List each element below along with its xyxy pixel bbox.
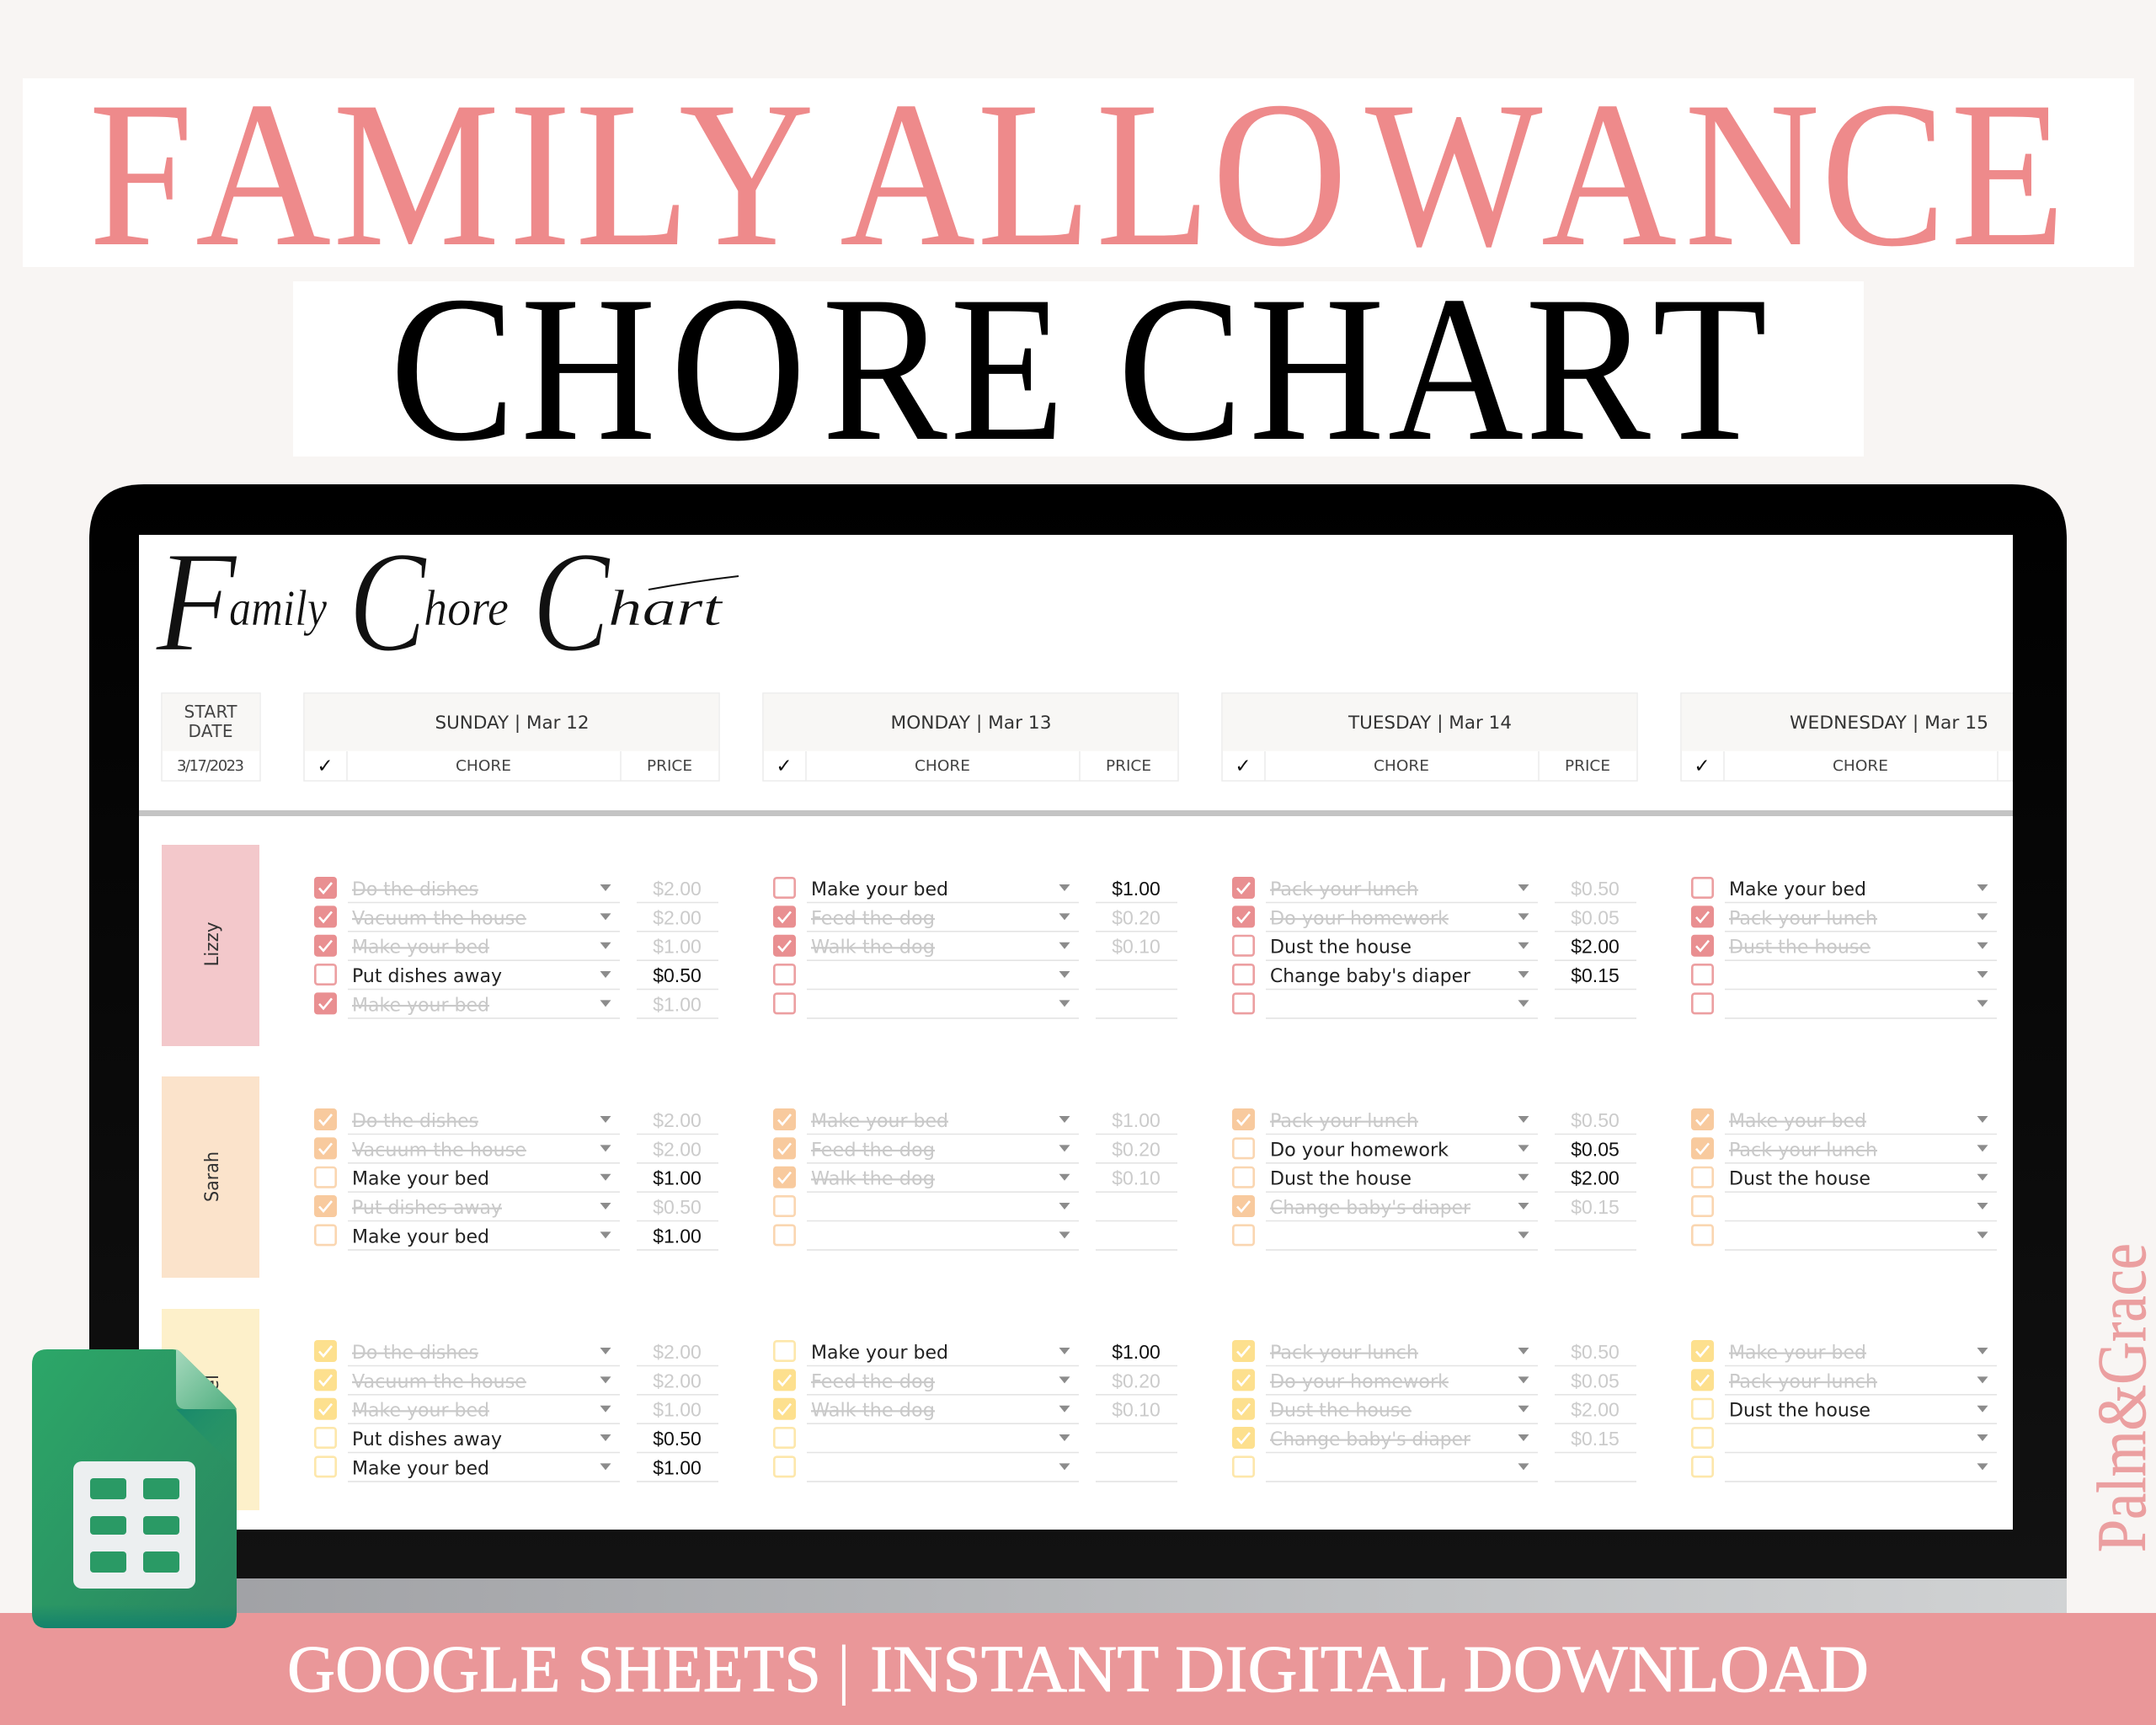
spreadsheet script title: F (155, 522, 238, 682)
Sarah Monday chores: Make your bed (811, 1111, 948, 1132)
icon: Google Sheets (32, 1349, 237, 1628)
day header: Wednesday: WEDNESDAY | Mar 15 (1790, 713, 1988, 734)
Sarah Wednesday chores: Dust the house (1729, 1169, 1870, 1190)
Sarah Tuesday chores: Do your homework (1270, 1140, 1449, 1161)
Lizzy Monday chores: Walk the dog (811, 937, 935, 959)
Lizzy Sunday chores: Do the dishes (352, 879, 478, 900)
Sarah Wednesday chores (1691, 1108, 1997, 1251)
third child Sunday chores: $1.00 (653, 1456, 702, 1478)
third child Monday chores: Walk the dog (811, 1401, 935, 1422)
day header: Monday: MONDAY | Mar 13 (891, 713, 1051, 734)
day header: Monday: CHORE (915, 757, 970, 775)
Sarah Wednesday chores: Make your bed (1729, 1111, 1866, 1132)
third child Wednesday chores: Pack your lunch (1729, 1371, 1877, 1392)
Sarah Tuesday chores: $2.00 (1571, 1167, 1620, 1189)
Lizzy Sunday chores: $1.00 (653, 936, 702, 958)
spreadsheet script title: C (349, 522, 428, 682)
day header: Tuesday: CHORE (1374, 757, 1429, 775)
Lizzy Tuesday chores: $0.50 (1571, 878, 1620, 900)
Sarah Tuesday chores: $0.05 (1571, 1138, 1620, 1160)
third child Tuesday chores: $0.05 (1571, 1370, 1620, 1391)
third child Sunday chores: Make your bed (352, 1458, 489, 1479)
third child Monday chores (773, 1341, 1177, 1482)
third child Sunday chores: $1.00 (653, 1399, 702, 1421)
spreadsheet script title (156, 555, 739, 650)
Lizzy Monday chores: $1.00 (1112, 878, 1161, 900)
spreadsheet script title: amily (229, 580, 327, 636)
spreadsheet script title: hart (608, 580, 723, 636)
Sarah Tuesday chores: Pack your lunch (1270, 1111, 1418, 1132)
third child Monday chores: $1.00 (1112, 1341, 1161, 1363)
Lizzy Tuesday chores: $0.15 (1571, 964, 1620, 986)
Lizzy Tuesday chores: Do your homework (1270, 908, 1449, 929)
day header: Tuesday: TUESDAY | Mar 14 (1348, 713, 1512, 734)
third child Sunday chores: Make your bed (352, 1401, 489, 1422)
Sarah Tuesday chores (1232, 1108, 1636, 1250)
start date box (162, 693, 260, 781)
Lizzy Tuesday chores: Dust the house (1270, 937, 1412, 959)
Lizzy Sunday chores (314, 877, 718, 1018)
day header: Monday: PRICE (1106, 757, 1151, 775)
day header: Sunday: CHORE (456, 757, 511, 775)
third child Monday chores: $0.10 (1112, 1399, 1161, 1421)
footer banner (0, 1613, 2156, 1725)
third child Monday chores: $0.20 (1112, 1370, 1161, 1391)
Lizzy Wednesday chores: Pack your lunch (1729, 908, 1877, 929)
start date box: 3/17/2023 (177, 757, 244, 775)
Sarah Monday chores: Walk the dog (811, 1169, 935, 1190)
Lizzy Monday chores: $0.10 (1112, 936, 1161, 958)
Lizzy Sunday chores: $1.00 (653, 993, 702, 1015)
Sarah Sunday chores: Make your bed (352, 1226, 489, 1247)
Sarah Sunday chores: Vacuum the house (352, 1140, 526, 1161)
footer text (287, 1633, 1869, 1706)
Sarah Tuesday chores: $0.15 (1571, 1196, 1620, 1218)
third child Wednesday chores: Dust the house (1729, 1401, 1870, 1422)
third child Sunday chores: Put dishes away (352, 1429, 502, 1450)
Sarah Sunday chores: $1.00 (653, 1167, 702, 1189)
Lizzy Sunday chores: Put dishes away (352, 966, 502, 987)
Sarah Sunday chores: Make your bed (352, 1169, 489, 1190)
Sarah Sunday chores: $0.50 (653, 1196, 702, 1218)
Lizzy Sunday chores: Make your bed (352, 995, 489, 1016)
Lizzy Monday chores: Make your bed (811, 879, 948, 900)
Sarah Sunday chores: Put dishes away (352, 1198, 502, 1219)
header divider (139, 810, 2013, 816)
Lizzy Sunday chores: Make your bed (352, 937, 489, 959)
Sarah Sunday chores (314, 1108, 718, 1250)
Sarah Wednesday chores: Pack your lunch (1729, 1140, 1877, 1161)
footer text: | (837, 1633, 851, 1706)
day header: Sunday: SUNDAY | Mar 12 (435, 713, 590, 734)
Sarah Monday chores: $1.00 (1112, 1109, 1161, 1131)
person panel: Sarah (162, 1076, 259, 1278)
third child Sunday chores: $0.50 (653, 1428, 702, 1450)
footer text: INSTANT DIGITAL DOWNLOAD (870, 1633, 1869, 1706)
person panel: Sarah: Sarah (202, 1151, 223, 1202)
Sarah Monday chores: Feed the dog (811, 1140, 935, 1161)
third child Monday chores: Make your bed (811, 1343, 948, 1364)
day header: Wednesday: CHORE (1833, 757, 1888, 775)
Lizzy Tuesday chores: $2.00 (1571, 936, 1620, 958)
third child Monday chores: Feed the dog (811, 1371, 935, 1392)
Sarah Sunday chores: $1.00 (653, 1225, 702, 1247)
day header: Monday (763, 693, 1178, 781)
laptop base (89, 1575, 2067, 1614)
laptop (89, 484, 2096, 1614)
third child Tuesday chores: Pack your lunch (1270, 1343, 1418, 1364)
day header: Wednesday (1680, 692, 2013, 782)
third child Tuesday chores: Do your homework (1270, 1371, 1449, 1392)
third child Sunday chores: Do the dishes (352, 1343, 478, 1364)
day header: Tuesday (1222, 693, 1637, 781)
third child Sunday chores: $2.00 (653, 1341, 702, 1363)
third child Tuesday chores: Change baby's diaper (1270, 1429, 1471, 1450)
day header: Monday: ✓ (776, 756, 792, 777)
footer text: GOOGLE SHEETS (287, 1633, 821, 1706)
title: CHORE CHART: CHORE CHART (390, 254, 1767, 485)
Sarah Monday chores (773, 1108, 1177, 1250)
third child Tuesday chores: $0.15 (1571, 1428, 1620, 1450)
start date box: START (184, 702, 237, 722)
person panel: Lizzy: Lizzy (202, 921, 223, 967)
day header: Sunday: PRICE (647, 757, 692, 775)
Sarah Sunday chores: $2.00 (653, 1109, 702, 1131)
Lizzy Monday chores (773, 878, 1177, 1018)
day header: Wednesday: ✓ (1694, 756, 1710, 777)
Sarah Tuesday chores: Dust the house (1270, 1169, 1412, 1190)
day header: Wednesday: PRICE (2024, 757, 2069, 775)
third child Sunday chores (314, 1340, 718, 1482)
person panel: third child (162, 1309, 259, 1510)
Sarah Tuesday chores: $0.50 (1571, 1109, 1620, 1131)
spreadsheet script title: C (532, 522, 611, 682)
person panel: Lizzy (162, 845, 259, 1046)
day header: Sunday: ✓ (317, 756, 334, 777)
title: FAMILY ALLOWANCE: FAMILY ALLOWANCE (88, 59, 2065, 291)
title band: family allowance (23, 59, 2134, 291)
Lizzy Monday chores: $0.20 (1112, 906, 1161, 928)
spreadsheet script title: hore (424, 580, 509, 636)
Lizzy Tuesday chores (1232, 877, 1636, 1018)
title band: chore chart (293, 254, 1864, 485)
third child Tuesday chores: $2.00 (1571, 1399, 1620, 1421)
laptop bezel (89, 484, 2067, 1578)
third child Wednesday chores (1691, 1340, 1997, 1482)
Lizzy Wednesday chores: Dust the house (1729, 937, 1870, 959)
Lizzy Tuesday chores: Change baby's diaper (1270, 966, 1471, 987)
laptop screen (139, 522, 2096, 1530)
third child Tuesday chores: Dust the house (1270, 1401, 1412, 1422)
Lizzy Tuesday chores: Pack your lunch (1270, 879, 1418, 900)
Lizzy Tuesday chores: $0.05 (1571, 906, 1620, 928)
third child Tuesday chores (1232, 1340, 1636, 1482)
third child Wednesday chores: Make your bed (1729, 1343, 1866, 1364)
third child Tuesday chores: $0.50 (1571, 1341, 1620, 1363)
Lizzy Wednesday chores (1691, 877, 1997, 1019)
day header: Sunday (304, 693, 719, 781)
Lizzy Sunday chores: $2.00 (653, 906, 702, 928)
Sarah Monday chores: $0.10 (1112, 1167, 1161, 1189)
Sarah Sunday chores: $2.00 (653, 1138, 702, 1160)
start date box: DATE (189, 721, 232, 741)
Lizzy Sunday chores: Vacuum the house (352, 908, 526, 929)
third child Sunday chores: $2.00 (653, 1370, 702, 1391)
Lizzy Sunday chores: $0.50 (653, 964, 702, 986)
day header: Tuesday: ✓ (1235, 756, 1251, 777)
Lizzy Sunday chores: $2.00 (653, 878, 702, 900)
Sarah Monday chores: $0.20 (1112, 1138, 1161, 1160)
third child Sunday chores: Vacuum the house (352, 1371, 526, 1392)
Sarah Sunday chores: Do the dishes (352, 1111, 478, 1132)
Lizzy Wednesday chores: Make your bed (1729, 879, 1866, 900)
Lizzy Monday chores: Feed the dog (811, 908, 935, 929)
day header: Tuesday: PRICE (1565, 757, 1610, 775)
person panel: third child: el (202, 1375, 223, 1391)
Sarah Tuesday chores: Change baby's diaper (1270, 1198, 1471, 1219)
